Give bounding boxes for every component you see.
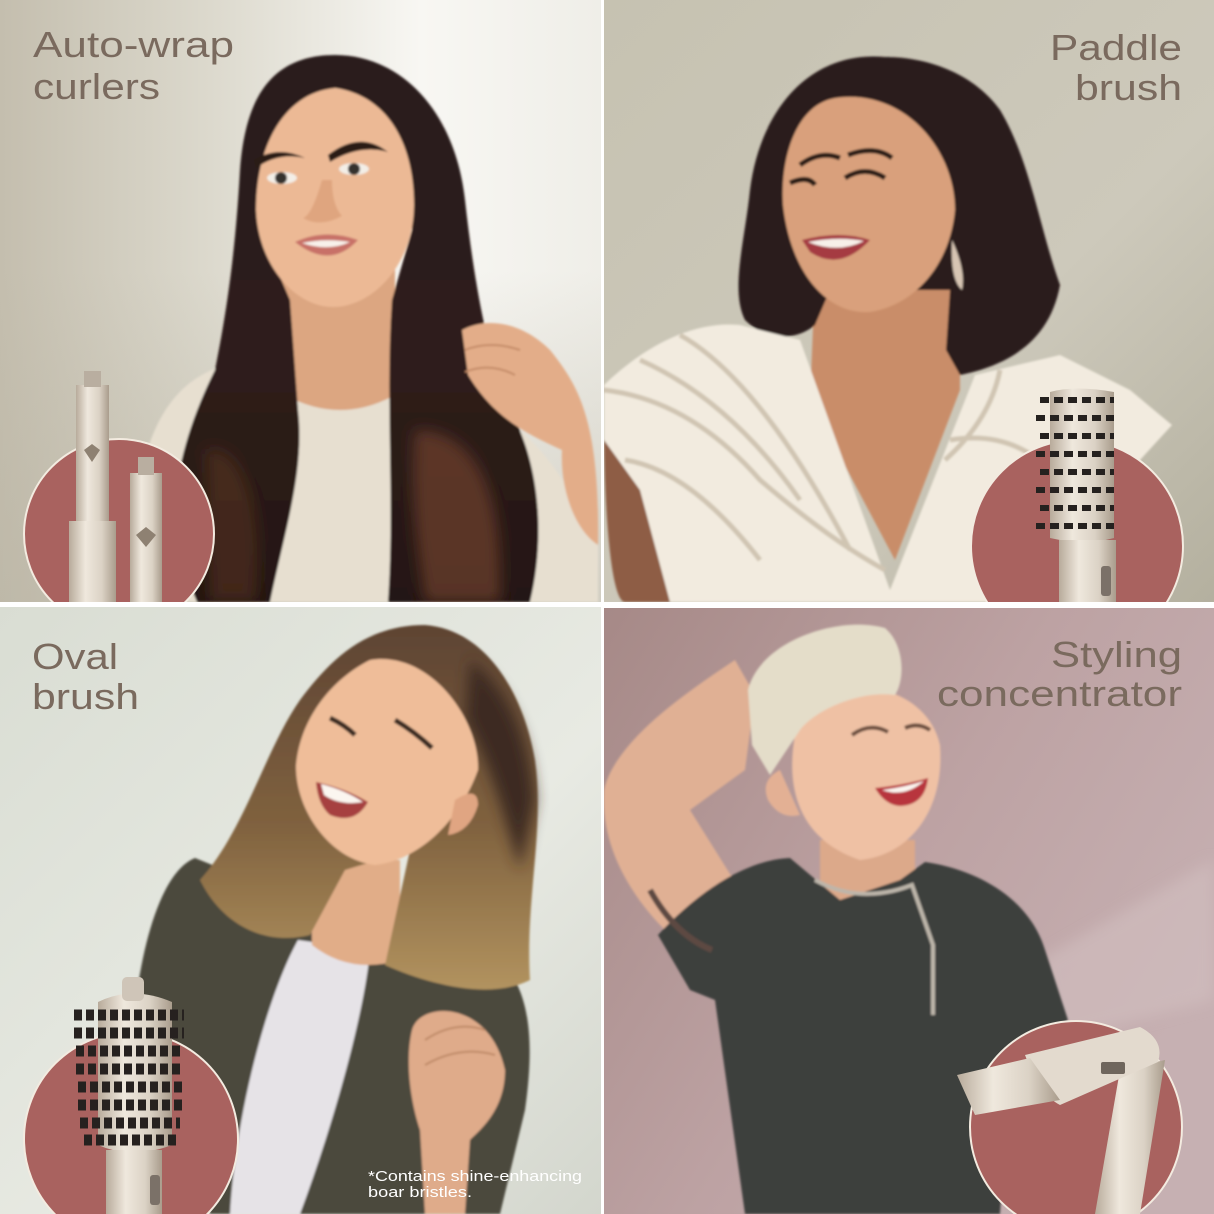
product circle: curlers [24, 371, 214, 629]
product circle: concentrator [957, 1021, 1182, 1214]
panel: oval brush [0, 607, 601, 1214]
panel: styling concentrator: concentrator [937, 673, 1182, 714]
panel: paddle brush: brush [1075, 67, 1182, 108]
heading: Oval [32, 636, 118, 677]
heading: Styling [1051, 634, 1182, 675]
product circle: oval brush [24, 977, 238, 1214]
woman with long dark hair [130, 55, 598, 602]
panel: styling concentrator [604, 608, 1214, 1214]
laughing woman in blazer [136, 625, 538, 1214]
panel: auto-wrap curlers [0, 0, 601, 629]
woman with dark bob [604, 56, 1172, 602]
panel: oval brush: boar bristles. [368, 1184, 472, 1201]
heading: Auto-wrap [33, 24, 234, 65]
heading: Paddle [1050, 27, 1182, 68]
panel: paddle brush [604, 0, 1214, 652]
footnote: *Contains shine-enhancing [368, 1168, 582, 1185]
woman with short blonde hair [604, 625, 1068, 1214]
panel: auto-wrap curlers: curlers [33, 66, 160, 107]
product circle: paddle brush [972, 388, 1184, 602]
panel: oval brush: brush [32, 676, 139, 717]
